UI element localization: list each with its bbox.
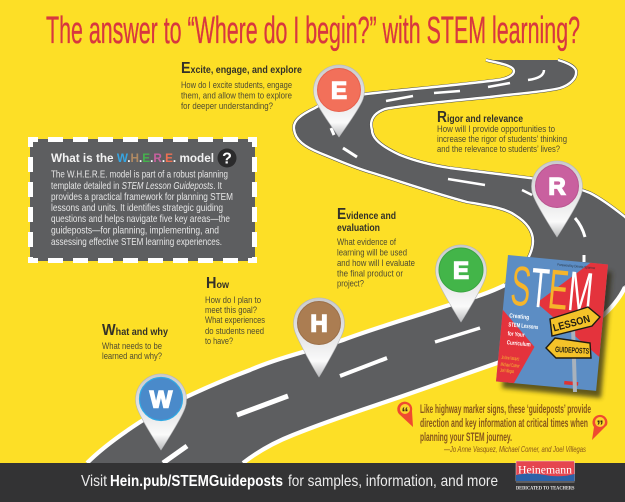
- winding road: [87, 60, 625, 463]
- text block: what and why: What needs to be: [102, 340, 162, 351]
- pin: E excite: [314, 65, 364, 137]
- quote text: [420, 402, 591, 454]
- footer bar: [0, 463, 625, 502]
- text block: rigor: and the relevance to students’ lives?: [437, 143, 560, 154]
- book cover: Michael Comer: [500, 362, 520, 370]
- book cover: Foreword by Dennis Sparrow: [557, 263, 596, 270]
- icon: opening quote pin: “: [402, 404, 408, 420]
- panel body text: provides a practical framework for planning STEM: [51, 192, 233, 203]
- panel body text: assessing effective STEM learning experiences.: [51, 237, 222, 248]
- text block: evidence: learning will be used: [337, 246, 407, 258]
- panel body text: lessons and units. It identifies strategic guiding: [51, 203, 223, 214]
- text block: how: do students need: [205, 325, 264, 336]
- panel body text: [51, 170, 233, 248]
- panel body text: The W.H.E.R.E. model is part of a robust planning: [51, 170, 228, 180]
- text block: excite: How do I excite students, engage: [181, 79, 292, 90]
- text block: excite: them, and allow them to explore: [181, 90, 292, 100]
- pin: E evidence: [436, 245, 486, 322]
- pin: H how: H: [310, 310, 328, 338]
- pin: E evidence: E: [453, 258, 469, 284]
- panel: what is the W.H.E.R.E. model: [28, 137, 257, 263]
- text block: how: [205, 275, 265, 346]
- text block: how: meet this goal?: [205, 304, 257, 315]
- book cover: STEM: [508, 254, 596, 324]
- book signpost: LESSON: [552, 313, 591, 334]
- text block: evidence: and how will I evaluate: [337, 257, 415, 268]
- panel body text: guideposts—for planning, implementing, and: [51, 226, 219, 236]
- pin: H how: [294, 298, 344, 377]
- pin: W what: [136, 374, 186, 450]
- quote text: planning your STEM journey.: [420, 430, 512, 444]
- icon: question mark: ?: [222, 150, 232, 168]
- icon: closing quote pin: [592, 415, 607, 440]
- text block: what and why: learned and why?: [102, 350, 162, 361]
- book cover: for Your: [507, 331, 525, 339]
- panel body text: template detailed in STEM Lesson Guideposts. It: [51, 181, 222, 192]
- panel body text: questions and helps navigate five key areas—the: [51, 214, 230, 225]
- book cover: Curriculum: [506, 340, 531, 349]
- text block: rigor: [437, 109, 567, 154]
- book cover: Creating: [509, 313, 530, 321]
- text block: excite: [181, 60, 302, 111]
- logo: Heinemann: [516, 461, 575, 492]
- icon: question mark: [218, 148, 236, 168]
- book signpost: [546, 307, 600, 392]
- footer text: Hein.pub/STEMGuideposts: [110, 473, 283, 490]
- logo: Heinemann: Heinemann: [518, 464, 572, 476]
- text block: evidence: What evidence of: [337, 236, 396, 247]
- text block: evidence: evaluation: [337, 223, 380, 234]
- footer text: for samples, information, and more: [288, 473, 498, 490]
- pin: W what: W: [150, 386, 173, 414]
- text block: what and why: [102, 322, 168, 361]
- text block: evidence: [337, 206, 415, 288]
- book cover: Joel Villegas: [500, 368, 515, 375]
- text block: how: to have?: [205, 335, 233, 346]
- text block: rigor: increase the rigor of students’ thinking: [437, 133, 567, 144]
- book signpost: GUIDEPOSTS: [555, 345, 590, 356]
- icon: closing quote pin: ”: [596, 417, 604, 433]
- text block: evidence: the final product or: [337, 268, 403, 278]
- text block: excite: for deeper understanding?: [181, 100, 273, 111]
- footer text: [81, 473, 498, 490]
- pin: R rigor: [532, 161, 582, 237]
- icon: opening quote pin: [397, 402, 413, 427]
- text block: rigor: Rigor and relevance: [437, 109, 523, 126]
- pin: R rigor: R: [548, 174, 566, 200]
- pin: E excite: E: [331, 78, 347, 104]
- text block: rigor: How will I provide opportunities to: [437, 123, 555, 134]
- book cover: Jo Anne Vasquez: [501, 355, 520, 363]
- panel heading: What is the W.H.E.R.E. model: [51, 151, 214, 165]
- text block: excite: Excite, engage, and explore: [181, 60, 302, 77]
- book cover: [496, 253, 612, 398]
- text block: how: How do I plan to: [205, 294, 261, 305]
- text block: evidence: project?: [337, 278, 364, 288]
- text block: how: How: [206, 275, 229, 292]
- book cover: STEM Lessons: [508, 322, 539, 331]
- footer text: Visit: [81, 473, 107, 490]
- text block: evidence: Evidence and: [337, 206, 396, 223]
- text block: what and why: What and why: [102, 322, 168, 339]
- text block: how: What experiences: [205, 314, 265, 325]
- logo: Heinemann: DEDICATED TO TEACHERS: [516, 486, 575, 492]
